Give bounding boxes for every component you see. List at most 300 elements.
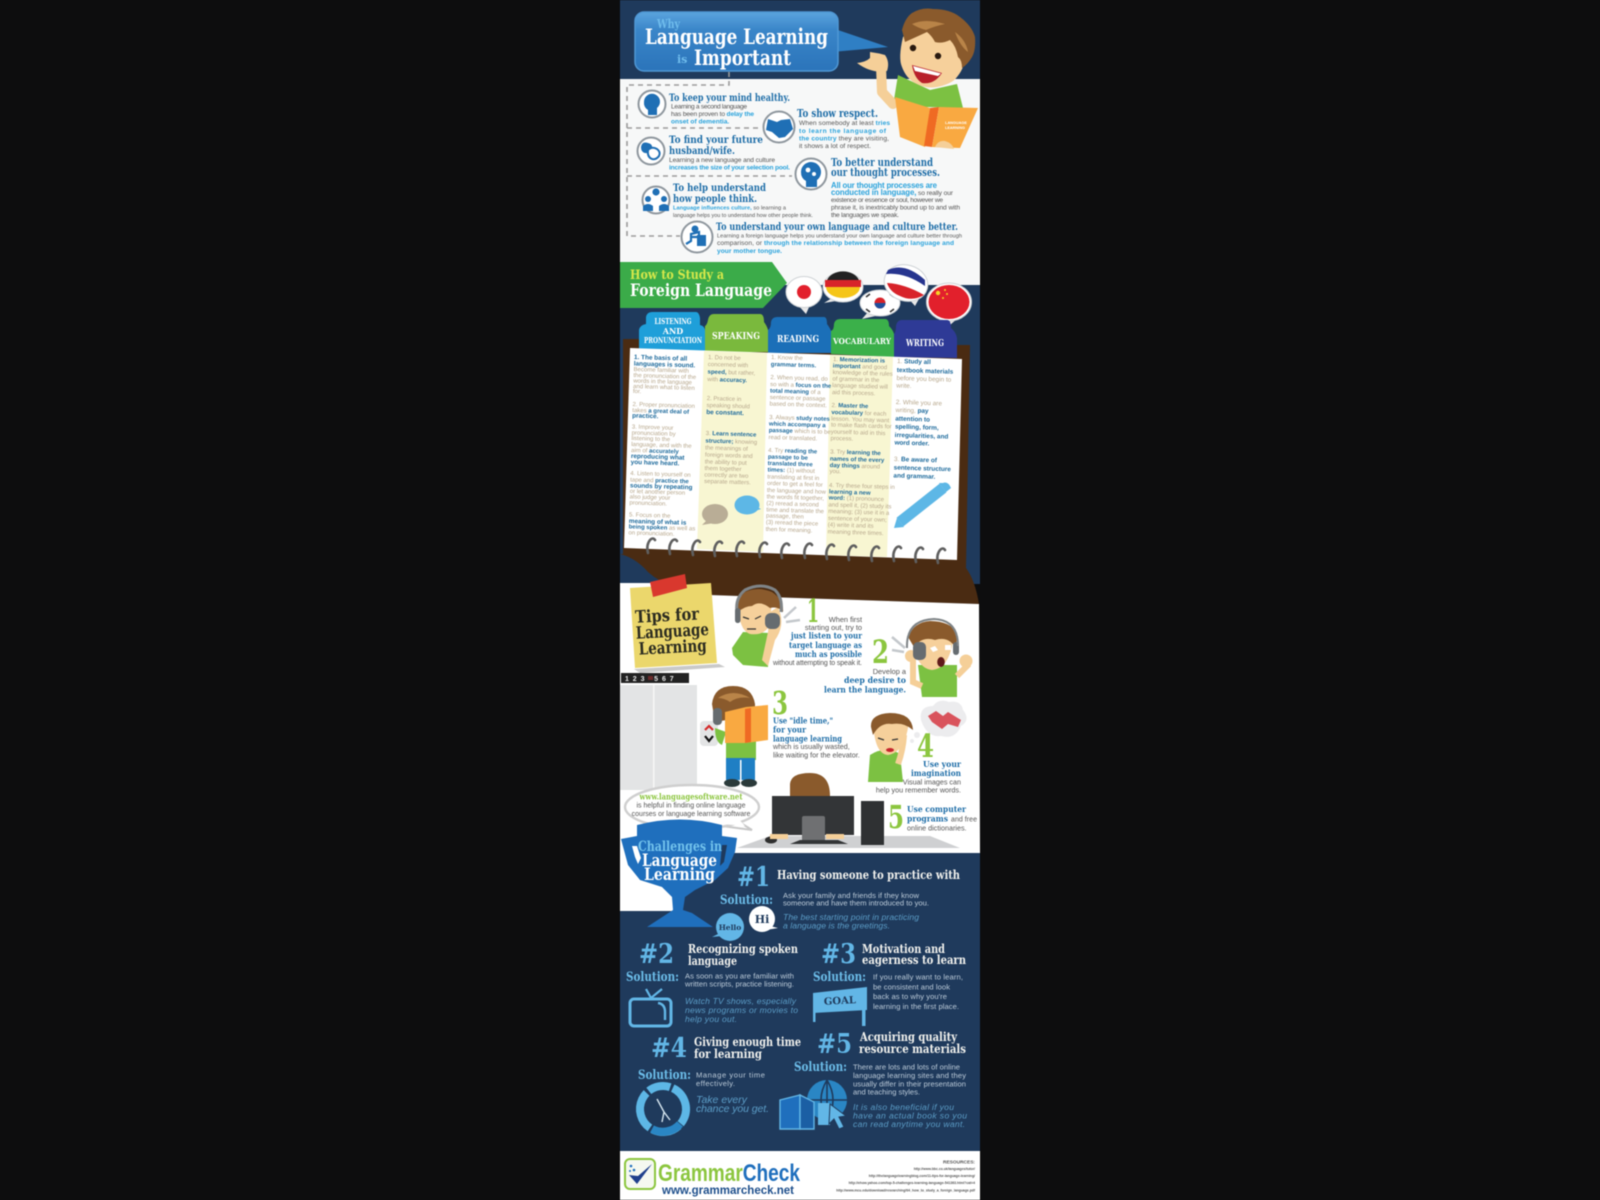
tip 5: computer scene: programs [907,814,948,824]
column text: writing: and grammar. [893,472,936,481]
challenge 5: It is also beneficial if you [853,1102,954,1112]
item: keep your mind healthy: onset of dementia. [671,118,729,126]
column text: reading: 1. Know the [771,355,803,362]
challenge 1: someone and have them introduced to you. [783,898,929,908]
illustration: thinking boy and cloud [868,701,967,782]
elevator floor indicator: 1 2 3 5 6 7 [625,676,674,683]
challenge 2 [626,939,798,1026]
sticky note: tips for language learning: Language [635,620,709,644]
column text: speaking: with accuracy. [706,377,747,384]
column text: vocabulary: vocabulary for each [831,410,886,418]
column text: reading: translating at first in [767,474,819,482]
tip 3: elevator scene: like waiting for the elevator. [773,750,860,760]
icon: television [630,989,671,1026]
column text: reading: 4. Try reading the [768,448,818,456]
challenge 3 [813,939,966,1026]
challenge 3: back as to why you're [873,992,947,1001]
elevator doors [620,685,697,790]
column text: reading: order to get a feel for [767,481,823,489]
column text: reading [765,355,834,535]
challenge 3: #3 [821,939,856,970]
column text: listening and pronunciation: sounds by repeating [630,482,693,491]
flag: thailand style stripes [880,260,932,306]
notebook tabs [639,312,957,358]
column text: vocabulary: word: (1) pronounce [828,495,885,503]
item: show respect: to learn the language of [799,128,887,135]
resources list: RESOURCES: [943,1160,975,1166]
column text: vocabulary: lesson. You may want [831,416,890,424]
tip 3: elevator scene: Use "idle time," [773,716,833,726]
column text: listening and pronunciation: or let another person [630,489,685,497]
speech bubble: languagesoftware.net: is helpful in finding online language [637,802,746,810]
speech bubble: languagesoftware.net [625,785,759,830]
challenge 1: a language is the greetings. [783,920,890,930]
challenge 2: news programs or movies to [685,1005,798,1015]
column text: vocabulary: yourself to aid in this [831,429,886,437]
challenge 2: Recognizing spoken [688,942,798,956]
column text: speaking: the meanings of [705,445,748,453]
title speech bubble: Important [694,45,791,70]
item: show respect: To show respect. [797,107,878,120]
column text: writing: word order. [893,439,930,448]
panel: footer [620,1151,980,1200]
challenge 3: If you really want to learn, [873,972,963,982]
item: better understand thought processes: existence or essence or soul, however we [831,197,943,204]
trophy with challenges heading: Learning [644,865,715,885]
column text: speaking: correctly are two [704,472,749,480]
icon: goal sign [813,987,867,1026]
column text: speaking: separate matters. [704,479,751,486]
tip 2: boy with desire [824,619,972,697]
item: understand how people think: Language influences culture, so learning a [673,206,787,212]
challenge 2: Watch TV shows, especially [685,996,797,1006]
panel: white strip beside green banner [760,262,980,285]
notebook paper with columns [624,348,962,560]
challenge 3: Motivation and [862,942,945,956]
challenge 5: can read anytime you want. [853,1119,965,1129]
column text: speaking: them together [704,466,742,473]
tip 4: imagination boy [868,701,967,794]
challenge 2: #2 [639,939,674,970]
item: better understand thought processes: the languages we speak. [831,212,899,219]
challenge 5: usually differ in their presentation [853,1080,966,1088]
notebook brown cover [620,339,979,604]
item: better understand thought processes: our thought processes. [831,166,940,179]
column text: speaking: the ability to put [705,459,747,467]
flag: japan [786,276,822,314]
item: show respect: When somebody at least tries [799,120,890,127]
column text: listening and pronunciation: words in the language [632,378,693,386]
column text: reading: the words fit together, [767,494,824,502]
icon: goal sign: GOAL [824,995,856,1008]
tip 4: imagination boy: Use your [923,759,962,769]
column text: writing: 3. Be aware of [894,456,938,464]
column text: reading: grammar terms. [771,362,817,369]
icon: speech bubbles [702,496,761,525]
item: understand your own language and culture [682,221,962,255]
column text: speaking: be constant. [706,409,744,417]
tip 1: listening boy: without attempting to speak it. [772,660,862,667]
column text: listening and pronunciation: languages is sound. [634,360,696,369]
item: understand how people think: how people think. [673,193,757,205]
icon: clock ring [632,1078,694,1140]
column text: reading: then for meaning. [766,527,813,534]
logo wordmark: GrammarCheck [658,1160,801,1187]
column text: listening and pronunciation: 1. The basis of all [634,354,688,363]
column text: writing: textbook materials [897,367,954,376]
challenge 4: Take every [696,1094,748,1106]
tip 2: boy with desire: learn the language. [824,684,906,694]
column text: vocabulary [827,357,899,537]
column text: listening and pronunciation: language, and with the [631,442,692,450]
challenge 4: Giving enough time [694,1035,801,1049]
item: keep your mind healthy: To keep your mind healthy. [669,92,790,104]
column text: vocabulary: you. [829,469,841,475]
icon: orange book: LEARNING [945,126,965,130]
column text: vocabulary: learning a new [829,489,871,497]
challenge 5: Acquiring quality [859,1030,958,1044]
tip 2: boy with desire: 2 [872,633,889,671]
column text: reading: time and translate the [766,507,825,515]
sticky note: tips for language learning [630,574,725,673]
speech bubble: languagesoftware.net: courses or language learning software [632,811,750,818]
column text: listening and pronunciation: aim of accurately [631,448,679,455]
tip 3: elevator scene: 3 [772,684,788,722]
tip 1: listening boy: 1 [807,592,819,630]
tab: writing: WRITING [905,339,944,349]
tip 4: imagination boy: help you remember words. [876,786,961,794]
icon: hello bubble [712,913,744,941]
item: understand your own language and culture: your mother tongue. [717,248,782,255]
tip 4: imagination boy: imagination [911,768,961,778]
column text: vocabulary: (4) write it and its [828,522,874,530]
flag: china [926,283,972,325]
column text: reading: 3. Always study notes [769,415,831,423]
challenge 4: Manage your time [696,1070,765,1080]
heading banner: how to study a foreign language: Foreign Language [630,281,772,301]
challenge 2: language [688,954,737,968]
column text: vocabulary: important and good [833,363,887,371]
column text: listening and pronunciation: Become familiar with [633,367,689,375]
column text: writing: writing, pay [894,407,929,415]
sticky note: tips for language learning: Learning [638,636,707,660]
tip 5: computer scene: Use computer [907,804,967,814]
column text: vocabulary: and spell it, (2) study its [828,502,892,510]
item: keep your mind healthy: has been proven to delay the [671,111,754,118]
item: find future husband or wife: To find your future [669,134,763,146]
elevator buttons [700,721,718,746]
website url: www.grammarcheck.net [661,1183,794,1197]
challenge 5: resource materials [859,1042,966,1056]
challenge 5: Solution: [794,1060,847,1075]
column text: vocabulary: of grammar in the [832,376,880,384]
column text: reading: so with a focus on the [770,382,832,390]
challenge 5: have an actual book so you [853,1110,967,1120]
flag: korea [860,290,900,319]
tab: speaking [705,314,768,352]
challenge 1: The best starting point in practicing [783,912,919,922]
tip 1: listening boy: When first [829,615,862,624]
column text: reading: (3) reread the piece [766,520,819,528]
speech bubble: languagesoftware.net: www.languagesoftware.net [639,792,743,802]
resources list: http://www.bbc.co.uk/languages/tutor/ [914,1167,975,1171]
challenge 3: learning in the first place. [873,1002,959,1011]
column text: speaking: 1. Do not be [708,355,741,362]
trophy with challenges heading: Language [642,851,717,871]
column text: writing: write. [895,382,912,390]
challenge 5: language learning sites and they [853,1071,966,1080]
item: show respect: it shows a lot of respect. [799,143,871,150]
icon: orange book [895,97,978,149]
item: understand how people think: language helps you to understand how other people think. [673,213,813,219]
column text: reading: 2. When you read, do [770,375,829,383]
resources list: http://thelanguagelearningblog.com/11-tips-for-language-learning/ [869,1174,975,1178]
column text: speaking: foreign words and [705,452,753,460]
column text: vocabulary: 1. Memorization is [833,357,886,365]
item: better understand thought processes [796,156,960,219]
column text: listening and pronunciation: 3. Improve your [632,424,674,432]
challenge 3: eagerness to learn [862,953,966,967]
column text: listening and pronunciation: 4. Listen to yourself on [630,471,691,479]
tip 3: elevator scene: language learning [773,734,842,744]
challenge 2: As soon as you are familiar with [685,972,794,980]
challenge 3: Solution: [813,970,866,985]
sticky note: tips for language learning: Tips for [635,604,700,628]
column text: listening and pronunciation: takes a great deal of [632,408,690,416]
tab: speaking: SPEAKING [712,332,760,342]
item: find future husband or wife [638,134,790,172]
column text: listening and pronunciation: pronunciation by [632,430,676,438]
challenge 5: There are lots and lots of online [853,1062,960,1072]
item: better understand thought processes: All our thought processes are [831,181,938,190]
challenge 4: for learning [694,1047,763,1061]
icon: hi bubble [749,906,778,932]
item: show respect: the country they are visiting, [799,136,889,142]
challenge 1: Solution: [720,893,773,908]
challenge 4 [632,1033,801,1140]
illustration: excited boy [892,619,972,697]
column text: reading: translated three [768,461,813,468]
column text: listening and pronunciation [627,354,701,539]
heading banner: how to study a foreign language: How to Study a [630,268,724,283]
panel: challenges navy background [620,853,980,1151]
tip 5: computer scene: 5 [888,798,904,836]
challenge 4: chance you get. [696,1103,769,1115]
column text: vocabulary: 2. Master the [831,403,869,410]
column text: listening and pronunciation: practice. [632,412,659,420]
column text: vocabulary: day things around [830,463,880,471]
tip 3: elevator scene: for your [773,724,807,734]
column text: speaking: 3. Learn sentence [706,431,757,439]
tip 2: boy with desire: deep desire to [844,675,906,685]
column text: listening and pronunciation: 2. Proper pronunciation [632,402,695,410]
column text: vocabulary: process. [830,436,854,443]
icon: orange book: LANGUAGE [945,121,967,125]
resources list: http://ehow.yahoo.com/top-5-challenges-learning-language-541363.html?cat=4 [849,1181,975,1185]
elevator floor indicator [621,673,689,683]
tab: listening and pronunciation: LISTENING [654,316,692,326]
challenge 3: be consistent and look [873,982,950,992]
column text: listening and pronunciation: also judge your [629,494,670,502]
column text: listening and pronunciation: pronunciation. [629,500,668,508]
column text: listening and pronunciation: listening to the [631,436,671,443]
challenge 1: Ask your family and friends if they know [783,891,920,900]
notebook [620,312,979,604]
column text: listening and pronunciation: for. [633,389,642,395]
panel: white strip behind trophy [620,853,682,911]
icon: hi bubble: Hi [755,913,769,926]
tip 5: computer scene [737,773,977,848]
column text: writing: attention to [895,415,930,424]
column text: writing [892,358,955,481]
challenge 5: #5 [817,1029,852,1060]
challenge 1: Having someone to practice with [777,868,960,882]
tip 5: computer scene: and free [951,816,977,824]
column text: listening and pronunciation: tape and practice the [630,477,690,485]
notebook spiral rings [647,538,945,563]
column text: reading: times: (1) without [767,467,815,475]
tip 4: imagination boy: Visual images can [903,778,961,786]
challenge 5: and teaching styles. [853,1088,920,1096]
column text: vocabulary: 4. Try these four steps in [829,483,895,491]
trophy with challenges heading: Challenges in [638,839,722,855]
challenge 2: help you out. [685,1014,737,1024]
column text: reading: total meaning of a [770,388,821,396]
item: understand how people think: To help understand [673,182,767,194]
heading banner: how to study a foreign language [620,262,787,308]
column text: vocabulary: aid this process. [832,390,876,397]
tip 3: elevator scene [620,673,860,790]
column text: listening and pronunciation: being spoken as well as [629,524,695,533]
column text: reading: based on the context. [769,401,827,409]
challenge 5 [780,1029,967,1130]
column text: listening and pronunciation: reproducing what [631,453,685,462]
icon: hello bubble: Hello [719,923,741,932]
tab: vocabulary: VOCABULARY [832,336,892,346]
tab: listening and pronunciation [639,312,705,351]
item: understand your own language and culture: To understand your own language and culture better. [716,221,958,233]
item: understand how people think [642,182,813,219]
column text: writing: sentence structure [894,464,951,473]
column text: reading: passage which is to be [769,428,831,436]
column text: writing: spelling, form, [895,423,939,432]
tab: writing [894,320,957,358]
item: keep your mind healthy [638,90,790,126]
column text: reading: (2) reread a second [766,501,819,509]
title speech bubble: Language Learning [645,24,828,49]
column text: vocabulary: sentence of your own; [828,516,887,524]
column text: writing: before you begin to [896,375,952,384]
item: understand your own language and culture: Learning a foreign language helps you understand your own language and culture better through [717,234,962,240]
column text: reading: the language and how [767,488,827,496]
column text: speaking: speed, but rather, [707,369,756,377]
column text: speaking: 2. Practice in [707,396,742,403]
panel: why language learning header [620,0,980,263]
column text: writing: 1. Study all [897,358,931,366]
challenge 1 [712,862,960,941]
flags speech bubbles [786,260,972,325]
column text: vocabulary: meaning; (3) use it in a [828,509,890,517]
column text: reading: read or translated. [768,435,818,442]
title speech bubble: is [677,53,687,66]
challenge 1: #1 [737,862,770,893]
illustration: boy with headphones [732,586,800,667]
column text: listening and pronunciation: on pronunciation. [628,530,675,538]
column text: vocabulary: names of the every [830,456,885,464]
item: better understand thought processes: phrase it, is inextricably bound up to and with [831,204,960,212]
tip 1: listening boy: starting out, try to [805,623,862,632]
column text: listening and pronunciation: 5. Focus on the [629,512,671,520]
tab: listening and pronunciation: PRONUNCIATION [644,335,702,345]
tip 3: elevator scene: which is usually wasted, [772,742,850,751]
challenge 2: written scripts, practice listening. [684,980,794,988]
panel: tips section white background [620,583,980,853]
column text: listening and pronunciation: the pronunciation of the [633,373,697,381]
tab: listening and pronunciation: AND [662,326,683,336]
item: keep your mind healthy: Learning a second language [671,104,747,110]
column text: listening and pronunciation: meaning of what is [629,518,687,527]
column text: vocabulary: knowledge of the rules [833,370,893,378]
tab: reading [768,317,831,353]
column text: vocabulary: language studied will [832,383,888,391]
column text: vocabulary: to make flash cards for [831,422,892,430]
tip 5: computer scene: online dictionaries. [907,824,967,832]
logo: grammarcheck check mark [625,1159,655,1189]
tip 1: listening boy: target language as [789,640,862,650]
column text: writing: irregularities, and [895,432,949,441]
column text: writing: 2. While you are [896,399,942,407]
item: find future husband or wife: increases the size of your selection pool. [669,164,790,172]
column text: reading: passage, then [766,513,804,521]
tip 1: listening boy: just listen to your [790,630,862,640]
column text: speaking: speaking should [706,403,750,410]
challenge 4: effectively. [696,1079,735,1088]
column text: listening and pronunciation: and learn what to listen [633,384,695,392]
dashed connector lines [627,72,792,236]
column text: speaking: concerned with [708,362,748,369]
resources list [836,1160,976,1192]
title speech bubble: Why [656,17,681,31]
tip 1: listening boy [732,586,862,667]
item: understand your own language and culture: comparison, or through the relationship between the foreign language and [717,240,954,247]
tip 2: boy with desire: Develop a [873,667,907,676]
illustration: boy reading [712,686,768,787]
icon: book and globe [780,1080,847,1130]
resources list: http://www.mcu.edu/download/researching/tl4_how_to_study_a_foreign_language.pdf [836,1188,976,1192]
title speech bubble [635,12,888,71]
tip 1: listening boy: much as possible [795,649,862,659]
tab: reading: READING [777,335,819,345]
challenge 4: Solution: [638,1068,691,1083]
column text: reading: sentence or passage [770,395,826,403]
item: show respect [764,107,890,150]
flag: germany [823,271,863,303]
tab: vocabulary [831,319,894,357]
column text: listening and pronunciation: you have heard. [631,459,680,467]
icon: pencil [894,483,951,528]
challenge 2: Solution: [626,970,679,985]
challenge 4: #4 [651,1033,687,1064]
column text: reading: which accompany a [768,421,826,429]
item: find future husband or wife: husband/wife. [669,145,735,157]
tip 4: imagination boy: 4 [917,727,934,765]
item: better understand thought processes: To better understand [831,156,933,169]
column text: vocabulary: meaning three times. [828,529,884,537]
item: find future husband or wife: Learning a new language and culture [669,157,775,164]
column text: speaking [703,355,760,487]
panel: how to study navy background [620,284,980,584]
column text: vocabulary: 3. Try learning the [830,449,882,457]
